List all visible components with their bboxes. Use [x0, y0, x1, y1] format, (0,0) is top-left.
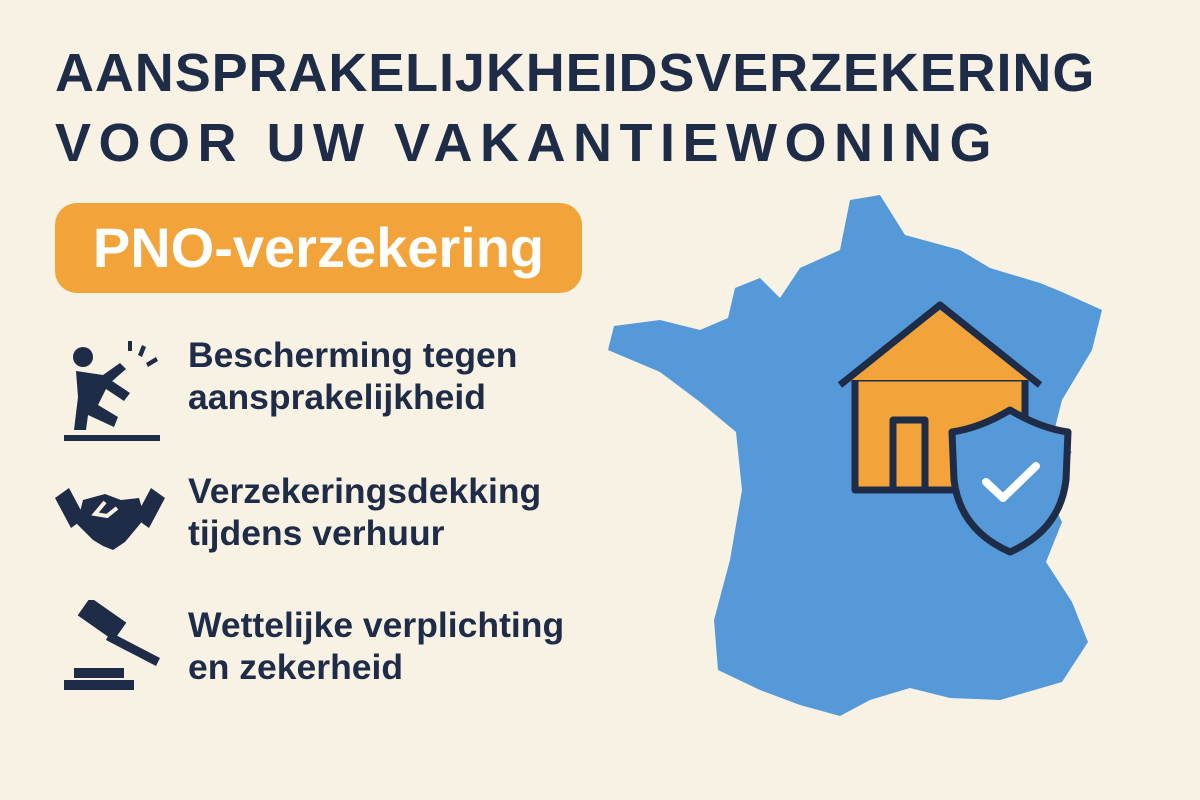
text: bescherming: aansprakelijkheid: [188, 377, 486, 417]
icon: falling person: [64, 341, 160, 441]
text: verzekeringsdekking: tijdens verhuur: [188, 513, 444, 553]
badge: PNO-verzekering: PNO-verzekering: [93, 216, 544, 279]
text: bescherming: Bescherming tegen: [188, 335, 517, 375]
icon: gavel: [64, 600, 160, 690]
badge: PNO-verzekering: [55, 203, 582, 293]
house: [840, 305, 1040, 490]
text: wettelijke: Wettelijke verplichting: [188, 605, 564, 645]
map shape: [608, 195, 1102, 716]
icon: handshake: [55, 488, 165, 550]
title: AANSPRAKELIJKHEIDSVERZEKERING: [55, 43, 1095, 103]
text: bescherming: [188, 335, 517, 417]
text: wettelijke: [188, 605, 564, 687]
text: verzekeringsdekking: [188, 471, 541, 553]
title: VOOR UW VAKANTIEWONING: [55, 113, 999, 173]
text: wettelijke: en zekerheid: [188, 647, 403, 687]
shield: [952, 410, 1068, 552]
title: [55, 43, 1095, 173]
text: verzekeringsdekking: Verzekeringsdekking: [188, 471, 541, 511]
